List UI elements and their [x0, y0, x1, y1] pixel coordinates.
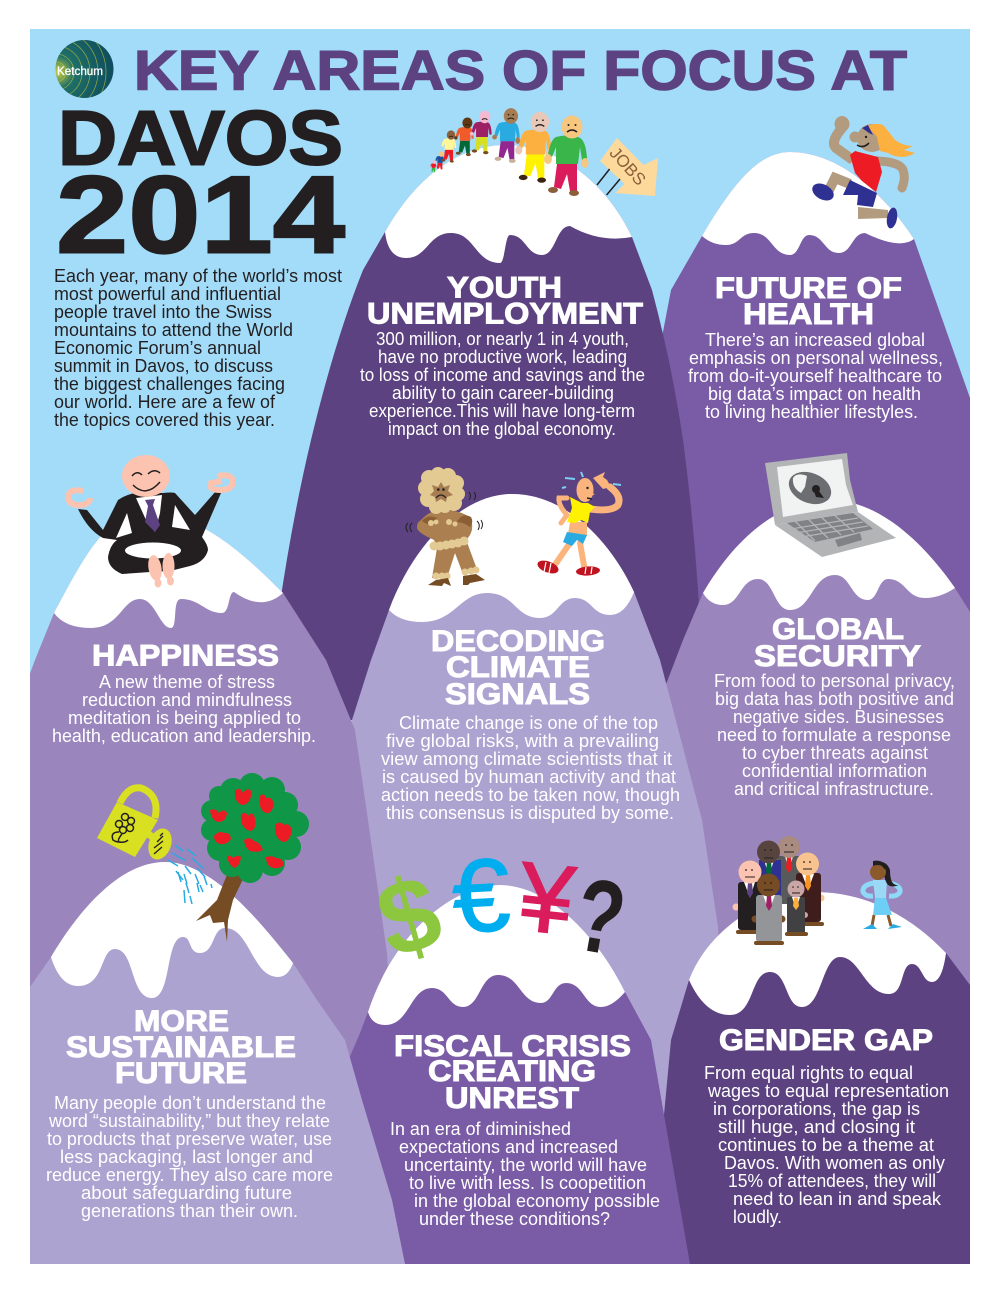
text: gender gap: From equal rights to equal	[704, 1063, 913, 1083]
text: fiscal crisis creating unrest: in the global economy possible	[414, 1191, 660, 1211]
panel: gender gap	[650, 836, 970, 1264]
text: more sustainable future: generations than their own.	[81, 1201, 298, 1221]
snow cap: gender gap	[689, 892, 946, 1015]
text: global security: need to formulate a response	[717, 725, 951, 745]
text: happiness: reduction and mindfulness	[82, 690, 292, 710]
text: fiscal crisis creating unrest: under these conditions?	[419, 1209, 610, 1229]
heading: future of health: FUTURE OF	[715, 272, 902, 305]
mountain: youth	[265, 145, 705, 720]
heading: more sustainable future: FUTURE	[115, 1057, 247, 1090]
text: youth unemployment: 300 million, or nearly 1 in 4 youth,	[376, 329, 629, 349]
text: gender gap: 15% of attendees, they will	[728, 1171, 936, 1191]
text: decoding climate signals	[381, 713, 680, 823]
text: gender gap: Davos. With women as only	[724, 1153, 945, 1173]
text: introduction: mountains to attend the World	[54, 320, 293, 340]
icon: sweating person in shorts	[536, 472, 621, 576]
icon: shivering person in parka	[406, 467, 485, 586]
text: global security: to cyber threats against	[742, 743, 928, 763]
mountain: sustainable future	[20, 862, 405, 1264]
icon: apple tree	[196, 773, 309, 942]
icon: line of job seekers	[430, 108, 588, 196]
text: future of health: There’s an increased global	[705, 330, 925, 350]
mountain: fiscal crisis	[340, 885, 690, 1264]
text: more sustainable future	[46, 1093, 333, 1221]
heading: more sustainable future: SUSTAINABLE	[66, 1031, 296, 1064]
icon: currency symbols and question mark: $	[365, 853, 453, 981]
heading: decoding climate signals	[432, 630, 604, 705]
text: youth unemployment	[360, 329, 645, 439]
snow cap: climate	[389, 494, 634, 622]
heading: future of health: HEALTH	[743, 298, 874, 331]
text: future of health: to living healthier lifestyles.	[705, 402, 918, 422]
heading: global security: SECURITY	[754, 640, 921, 673]
icon: currency symbols and question mark: ?	[567, 856, 633, 978]
heading: gender gap: GENDER GAP	[719, 1024, 933, 1057]
text: fiscal crisis creating unrest: to live with less. Is coopetition	[409, 1173, 646, 1193]
text: introduction: the biggest challenges facing	[54, 374, 285, 394]
heading: future of health	[716, 276, 902, 324]
logo: Ketchum: Ketchum	[57, 66, 103, 78]
text: decoding climate signals: action needs to be taken now, though	[381, 785, 680, 805]
text: more sustainable future: Many people don’t understand the	[54, 1093, 326, 1113]
icon: currency symbols and question mark: €	[450, 837, 513, 954]
text: gender gap	[704, 1063, 949, 1227]
text: gender gap: in corporations, the gap is	[713, 1099, 920, 1119]
heading: decoding climate signals: CLIMATE	[446, 651, 590, 684]
mountain: climate	[352, 494, 718, 1114]
text: future of health	[688, 330, 943, 422]
text: youth unemployment: experience.This will have long-term	[369, 401, 635, 421]
snow cap: fiscal crisis	[368, 885, 625, 1025]
panel: more sustainable future	[20, 773, 405, 1264]
text: decoding climate signals: view among climate scientists that it	[381, 749, 672, 769]
text: future of health: emphasis on personal wellness,	[689, 348, 943, 368]
text: introduction: our world. Here are a few of	[54, 392, 276, 412]
text: more sustainable future: about safeguarding future	[81, 1183, 292, 1203]
text: decoding climate signals: five global risks, with a prevailing	[386, 731, 659, 751]
text: more sustainable future: less packaging, last longer and	[60, 1147, 313, 1167]
text: introduction: people travel into the Swiss	[54, 302, 272, 322]
text: global security: big data has both positive and	[715, 689, 954, 709]
text: global security: confidential information	[742, 761, 927, 781]
panel: youth unemployment	[265, 108, 705, 720]
text: gender gap: need to lean in and speak	[733, 1189, 942, 1209]
text: gender gap: still huge, and closing it	[718, 1117, 915, 1137]
icon: businesswoman	[863, 861, 902, 929]
icon: laptop with padlock	[765, 453, 896, 557]
panel: future of health	[662, 116, 970, 612]
panel: decoding climate signals	[352, 467, 718, 1114]
text: decoding climate signals: Climate change is one of the top	[399, 713, 658, 733]
heading: global security	[754, 618, 922, 667]
text: global security: and critical infrastructure.	[734, 779, 934, 799]
panel: global security	[666, 453, 970, 985]
title: 2014: 2014	[56, 154, 345, 276]
text: gender gap: wages to equal representation	[707, 1081, 949, 1101]
icon: currency symbols and question mark: ¥	[513, 841, 580, 956]
icon: meditating businessman	[68, 455, 233, 588]
heading: fiscal crisis creating unrest	[394, 1030, 631, 1115]
heading: decoding climate signals: SIGNALS	[445, 678, 590, 711]
heading: more sustainable future	[66, 1005, 296, 1090]
heading: youth unemployment: YOUTH	[447, 272, 562, 304]
text: decoding climate signals: is caused by human activity and that	[382, 767, 676, 787]
text: more sustainable future: word “sustainability,” but they relate	[48, 1111, 330, 1131]
text: introduction: Each year, many of the world’s most	[54, 266, 342, 286]
heading: happiness: HAPPINESS	[92, 640, 279, 672]
text: gender gap: continues to be a theme at	[718, 1135, 934, 1155]
title: key areas of focus at: KEY AREAS OF FOCUS AT	[134, 38, 907, 102]
text: youth unemployment: ability to gain career-building	[392, 383, 614, 403]
text: gender gap: loudly.	[733, 1207, 782, 1227]
snow cap: sustainable future	[51, 862, 293, 998]
text: youth unemployment: impact on the global economy.	[388, 419, 616, 439]
text: introduction: the topics covered this year.	[54, 410, 275, 430]
mountain: health	[662, 152, 970, 612]
heading: fiscal crisis creating unrest: CREATING	[428, 1055, 596, 1088]
heading: youth unemployment: UNEMPLOYMENT	[367, 298, 643, 330]
text: decoding climate signals: this consensus is disputed by some.	[386, 803, 674, 823]
heading: more sustainable future: MORE	[134, 1005, 229, 1038]
text: global security: From food to personal privacy,	[714, 671, 955, 691]
icon: watering can	[97, 788, 176, 863]
mountain: global security	[666, 504, 970, 985]
panel: happiness	[30, 455, 388, 1057]
text: introduction: Economic Forum’s annual	[54, 338, 261, 358]
title: Davos: DAVOS	[58, 96, 343, 182]
snow cap: youth	[385, 145, 632, 263]
icon: group of men in suits	[732, 836, 824, 945]
text: fiscal crisis creating unrest: In an era of diminished	[390, 1119, 571, 1139]
text: youth unemployment: to loss of income and savings and the	[360, 365, 645, 385]
icon: currency symbols and question mark	[365, 837, 633, 981]
text: happiness: meditation is being applied to	[68, 708, 301, 728]
text: happiness: health, education and leadership.	[52, 726, 316, 746]
text: fiscal crisis creating unrest: expectations and increased	[399, 1137, 618, 1157]
mountain: happiness	[30, 529, 388, 1057]
snow cap: global security	[703, 500, 955, 610]
text: happiness: A new theme of stress	[99, 672, 275, 692]
text: global security	[714, 671, 955, 799]
heading: youth unemployment	[368, 276, 644, 324]
heading: fiscal crisis creating unrest: FISCAL CRISIS	[394, 1030, 631, 1063]
text: fiscal crisis creating unrest: uncertainty, the world will have	[404, 1155, 647, 1175]
panel: fiscal crisis creating unrest	[340, 837, 690, 1264]
text: youth unemployment: have no productive work, leading	[378, 347, 627, 367]
icon: jobs down arrow	[597, 138, 658, 196]
text: more sustainable future: reduce energy. They also care more	[46, 1165, 333, 1185]
snow cap: health	[702, 152, 914, 255]
heading: decoding climate signals: DECODING	[431, 625, 605, 658]
icon: jobs down arrow: JOBS	[606, 143, 650, 189]
text: happiness	[52, 672, 316, 746]
heading: global security: GLOBAL	[772, 613, 904, 646]
text: introduction	[54, 266, 342, 430]
snow cap: happiness	[54, 529, 283, 628]
mountain: gender gap	[650, 892, 970, 1264]
text: introduction: most powerful and influential	[54, 284, 281, 304]
text: more sustainable future: to products that preserve water, use	[47, 1129, 332, 1149]
icon: runner	[809, 116, 915, 229]
text: future of health: from do-it-yourself healthcare to	[688, 366, 942, 386]
text: introduction: summit in Davos, to discuss	[54, 356, 273, 376]
heading: fiscal crisis creating unrest: UNREST	[445, 1082, 579, 1115]
text: fiscal crisis creating unrest	[390, 1119, 660, 1229]
text: global security: negative sides. Businesses	[733, 707, 944, 727]
text: future of health: big data’s impact on health	[708, 384, 921, 404]
logo: Ketchum	[6, 22, 114, 122]
icon: water drops	[168, 845, 212, 904]
